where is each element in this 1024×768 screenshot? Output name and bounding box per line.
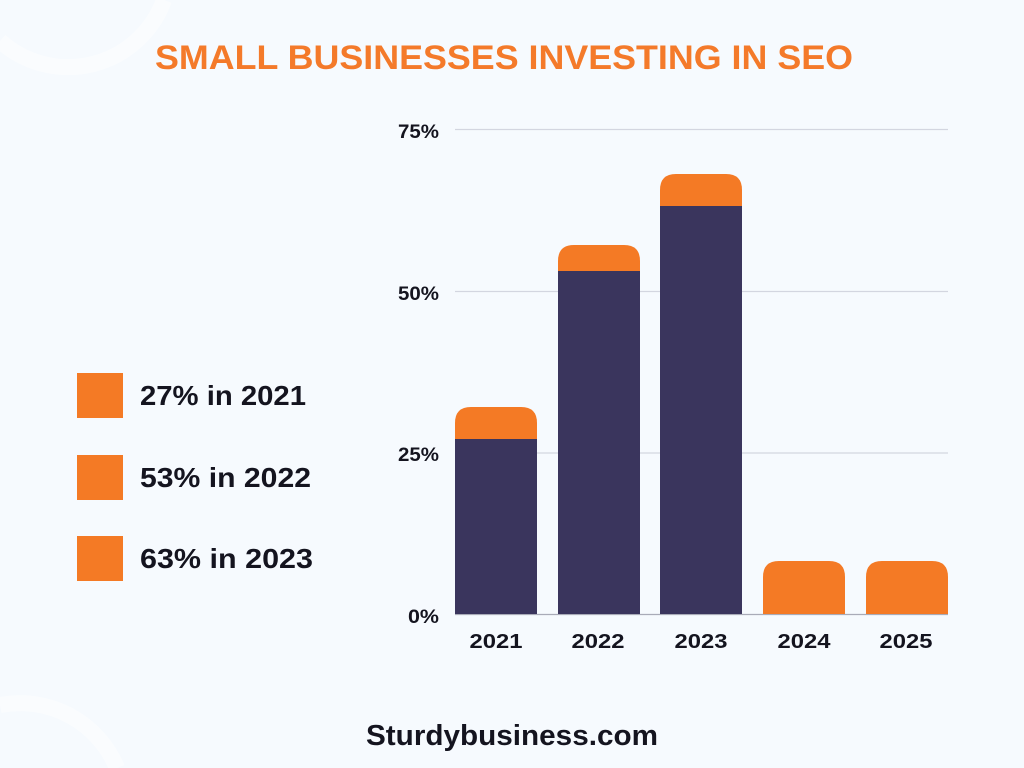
legend: [77, 373, 313, 581]
bar: 2021: [455, 407, 537, 614]
x axis labels: 2025: [880, 631, 932, 653]
bar: 2024: [763, 561, 845, 614]
footer source: Sturdybusiness.com: [366, 720, 658, 752]
y axis labels: 50%: [398, 284, 439, 305]
legend item: 2022: 53% in 2022: [140, 462, 311, 493]
legend item: 2022: [77, 455, 311, 500]
bar: 2023: [660, 174, 742, 614]
legend item: 2023: 63% in 2023: [140, 543, 313, 574]
y axis labels: 25%: [398, 445, 439, 466]
y axis labels: 75%: [398, 122, 439, 143]
y axis labels: [398, 122, 439, 628]
legend item: 2021: [77, 373, 306, 418]
x axis labels: 2022: [572, 631, 624, 653]
x axis labels: 2024: [778, 631, 832, 653]
x axis labels: [470, 631, 932, 653]
bar: 2025: [866, 561, 948, 614]
bar: 2022: [558, 245, 640, 614]
bar chart: [398, 122, 948, 653]
x axis labels: 2023: [674, 631, 728, 653]
title: SMALL BUSINESSES INVESTING IN SEO: [155, 39, 853, 77]
x axis labels: 2021: [470, 631, 522, 653]
legend item: 2021: 27% in 2021: [140, 380, 306, 411]
y axis labels: 0%: [408, 607, 439, 628]
legend item: 2023: [77, 536, 313, 581]
